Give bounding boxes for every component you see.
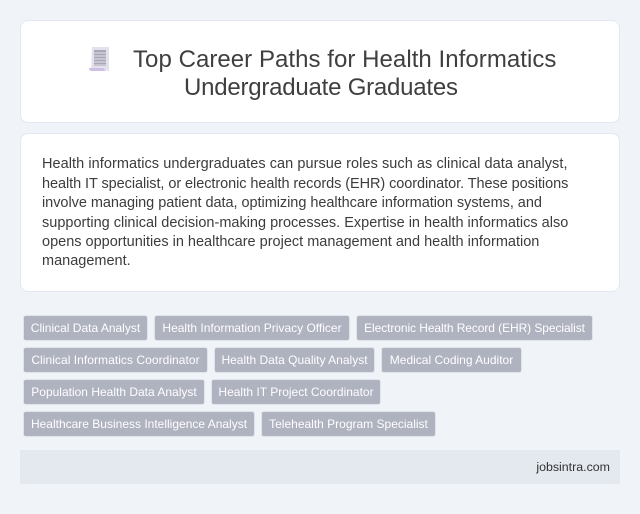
icon: document scroll: [89, 47, 109, 71]
tag: [23, 347, 208, 373]
tag: Clinical Data Analyst: [31, 321, 140, 335]
tag: Population Health Data Analyst: [31, 385, 197, 399]
tag: [381, 347, 522, 373]
tag: Healthcare Business Intelligence Analyst: [31, 417, 247, 431]
description text: management.: [42, 253, 131, 269]
tags: career paths: [23, 315, 593, 437]
tag: [214, 347, 375, 373]
description text: involve managing patient data, optimizing healthcare information systems, and: [42, 195, 542, 211]
tag: Clinical Informatics Coordinator: [31, 353, 200, 367]
heading line 1: Top Career Paths for Health Informatics: [133, 46, 556, 73]
panel: title: [20, 20, 620, 123]
tag: [154, 315, 350, 341]
tag: [23, 315, 148, 341]
tag: [261, 411, 436, 437]
tag: Electronic Health Record (EHR) Specialist: [364, 321, 585, 335]
heading line 2: Undergraduate Graduates: [184, 74, 458, 101]
tag: [211, 379, 381, 405]
tag: [356, 315, 593, 341]
tag: Health IT Project Coordinator: [218, 385, 374, 399]
panel: description: [20, 133, 620, 292]
footer: [20, 450, 620, 484]
description text: [42, 156, 568, 269]
tag: Health Information Privacy Officer: [162, 321, 342, 335]
footer source: jobsintra.com: [536, 460, 610, 474]
description text: opens opportunities in healthcare project management and health information: [42, 234, 539, 250]
description text: Health informatics undergraduates can pursue roles such as clinical data analyst,: [42, 156, 568, 172]
tag: [23, 411, 255, 437]
tag: Health Data Quality Analyst: [221, 353, 368, 367]
tag: Medical Coding Auditor: [390, 353, 513, 367]
description text: supporting clinical decision-making processes. Expertise in health informatics also: [42, 215, 568, 231]
description text: health IT specialist, or electronic health records (EHR) coordinator. These positions: [42, 176, 568, 192]
tag: [23, 379, 205, 405]
tag: Telehealth Program Specialist: [269, 417, 428, 431]
